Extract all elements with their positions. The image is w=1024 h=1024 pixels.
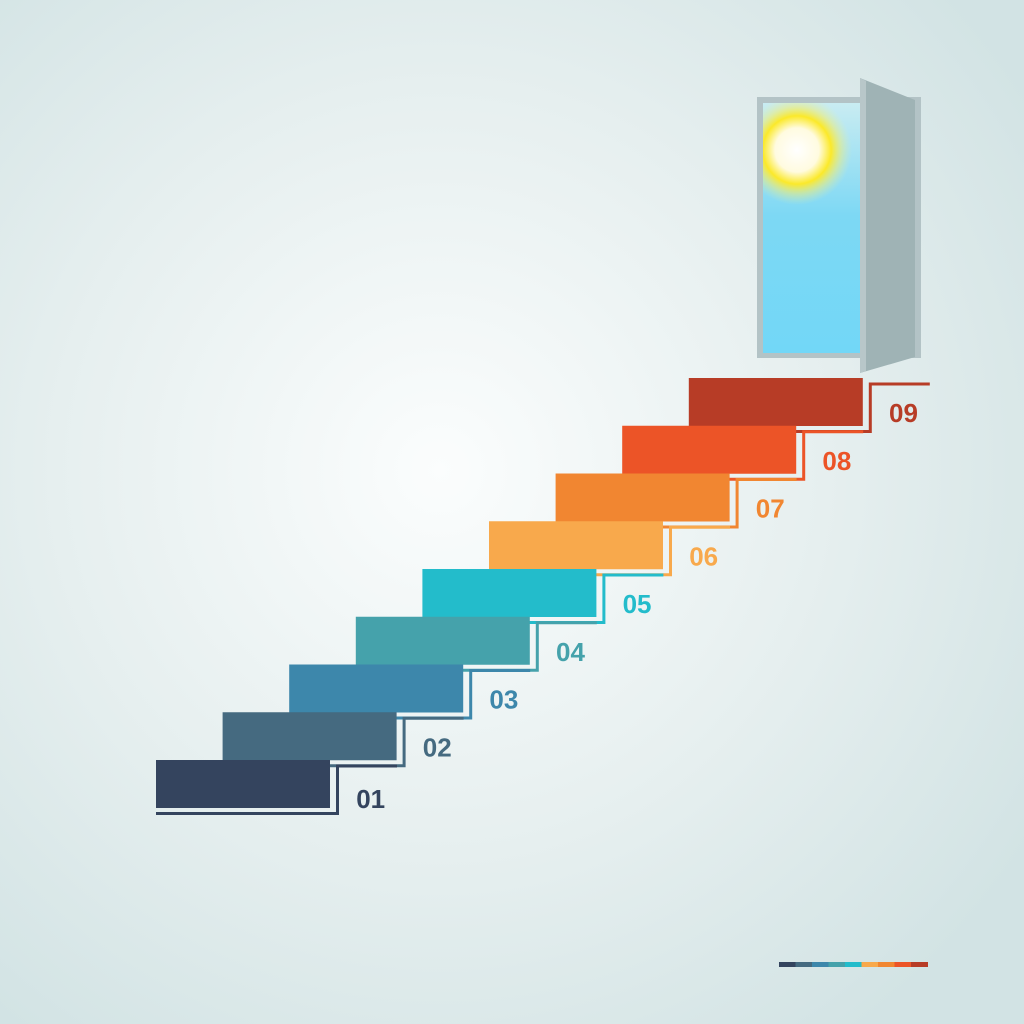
sky with sun bbox=[763, 103, 860, 353]
step 05 bbox=[422, 569, 663, 622]
step 08: 08 bbox=[822, 446, 851, 476]
step 05: 05 bbox=[623, 589, 652, 619]
door frame bbox=[757, 97, 921, 358]
step 03: 03 bbox=[489, 684, 518, 714]
step 01: 01 bbox=[356, 784, 385, 814]
open door panel bbox=[860, 78, 915, 373]
step 02: 02 bbox=[423, 732, 452, 762]
step 06: 06 bbox=[689, 541, 718, 571]
step 04 bbox=[356, 617, 597, 670]
step 03 bbox=[289, 664, 530, 718]
step 09 bbox=[689, 378, 930, 432]
step 07 bbox=[556, 474, 797, 527]
step 02 bbox=[223, 712, 464, 766]
step 01 bbox=[156, 760, 397, 814]
step 09: 09 bbox=[889, 398, 918, 428]
step 07: 07 bbox=[756, 494, 785, 524]
color key bar bbox=[779, 962, 928, 967]
step 04: 04 bbox=[556, 637, 585, 667]
step 08 bbox=[622, 426, 863, 479]
step 06 bbox=[489, 521, 730, 575]
door bbox=[742, 78, 921, 373]
